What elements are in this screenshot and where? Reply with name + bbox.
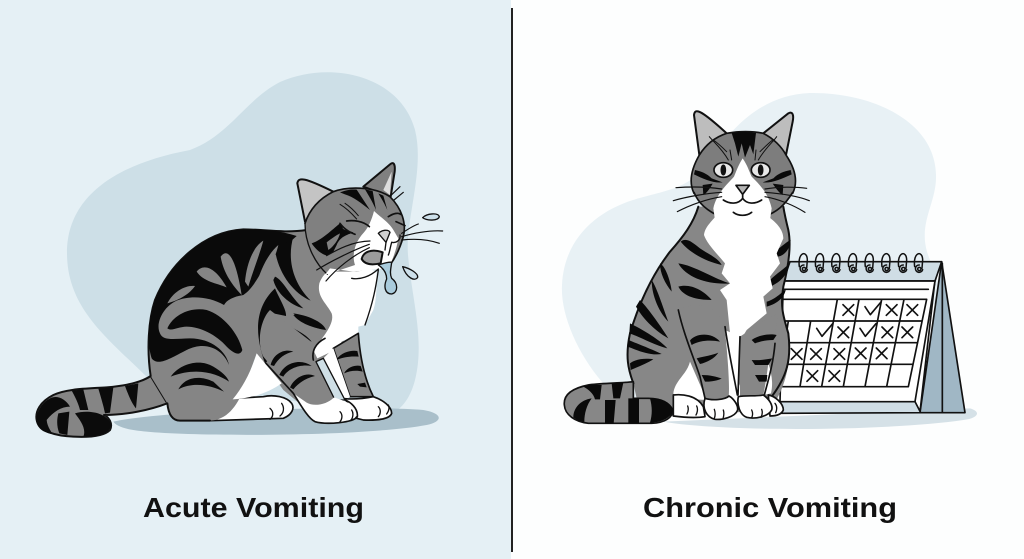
head: [297, 163, 443, 325]
cheek markings: [694, 170, 792, 195]
ground shadow: [663, 408, 977, 429]
hip white: [673, 362, 707, 400]
front left paw: [704, 396, 738, 419]
skull: [691, 132, 795, 218]
near leg strip: [316, 358, 345, 400]
illustration: acute vomiting cat: [36, 163, 443, 437]
mouth: [723, 194, 762, 215]
spiral binding: [799, 254, 923, 272]
near leg gray: [260, 310, 333, 405]
right foreleg: [739, 313, 779, 393]
black saddle and stripes: [149, 229, 326, 392]
near leg stripes: [271, 315, 325, 389]
leg stripes: [690, 334, 777, 382]
panel: acute background: [0, 0, 511, 559]
whiskers: [673, 187, 809, 212]
calendar base: [780, 402, 921, 413]
whiskers: [317, 187, 443, 281]
belly: [233, 353, 282, 399]
back left paw: [673, 395, 705, 418]
back paw: [210, 396, 293, 421]
skull outline: [305, 188, 404, 265]
open mouth: [362, 251, 383, 264]
legs and paws: [564, 305, 783, 423]
white band beside leg: [323, 348, 350, 400]
calendar page: [780, 281, 935, 402]
gray saddle stripes: [167, 241, 278, 303]
cheek gray holes: [327, 233, 340, 250]
tail: [564, 382, 672, 423]
ear left: [694, 111, 727, 155]
calendar: [780, 254, 965, 413]
stand fold: [920, 263, 942, 413]
skull: [305, 188, 404, 272]
check marks: [817, 302, 881, 336]
drool: [378, 262, 397, 294]
left foreleg: [678, 305, 730, 398]
tail: [36, 376, 167, 437]
white chest: [313, 262, 377, 358]
white chest: [704, 213, 783, 400]
far right paw: [768, 395, 783, 416]
illustration: chronic vomiting calendar scene: [564, 111, 977, 429]
front legs: [260, 310, 392, 423]
eyes: [714, 163, 770, 177]
heading: chronic vomiting: Chronic Vomiting: [643, 492, 897, 523]
acute background blob: [67, 72, 419, 415]
white leg column: [725, 330, 740, 403]
muzzle lines: [385, 235, 400, 255]
heading: acute vomiting: Acute Vomiting: [143, 492, 364, 523]
calendar stand: [920, 262, 965, 413]
far paw: [345, 397, 392, 420]
toes: [340, 405, 389, 422]
ears: [297, 179, 333, 222]
far leg stripes: [336, 351, 367, 387]
cheek markings: [312, 223, 353, 256]
panel: chronic background: [513, 0, 1024, 559]
skull outline: [691, 132, 795, 217]
forehead lines: [340, 203, 358, 219]
body stripes: [628, 240, 791, 370]
forehead stripes: [732, 132, 756, 158]
neck line: [305, 223, 327, 274]
front right paw: [738, 395, 772, 418]
ear right: [763, 113, 793, 155]
cat body fill: [149, 229, 377, 421]
ground shadow: [113, 408, 439, 435]
toes: [687, 403, 777, 419]
crosses: [791, 305, 918, 381]
leg outlines: [678, 310, 775, 398]
head: [673, 111, 809, 220]
nose: [378, 230, 390, 242]
white face: [325, 211, 398, 275]
closed eyes: [340, 213, 405, 234]
body outline: [149, 229, 307, 421]
near paw: [293, 393, 357, 423]
chronic background blob: [562, 93, 945, 400]
far ear: [363, 163, 395, 197]
body outline: [628, 207, 790, 397]
calendar grid: [780, 289, 928, 387]
far ear highlight: [383, 172, 392, 195]
tail stripes: [573, 383, 673, 423]
chin line: [352, 269, 378, 325]
calendar header strip: [783, 262, 942, 281]
divider: [511, 8, 513, 552]
forehead stripes: [340, 189, 387, 210]
cat body: [628, 207, 790, 417]
white face: [713, 158, 772, 220]
far leg: [333, 333, 373, 397]
white inner spot: [763, 363, 772, 395]
forehead lines: [709, 137, 777, 160]
droplets: [403, 214, 439, 279]
near leg outline: [266, 338, 357, 423]
nose: [736, 185, 749, 194]
